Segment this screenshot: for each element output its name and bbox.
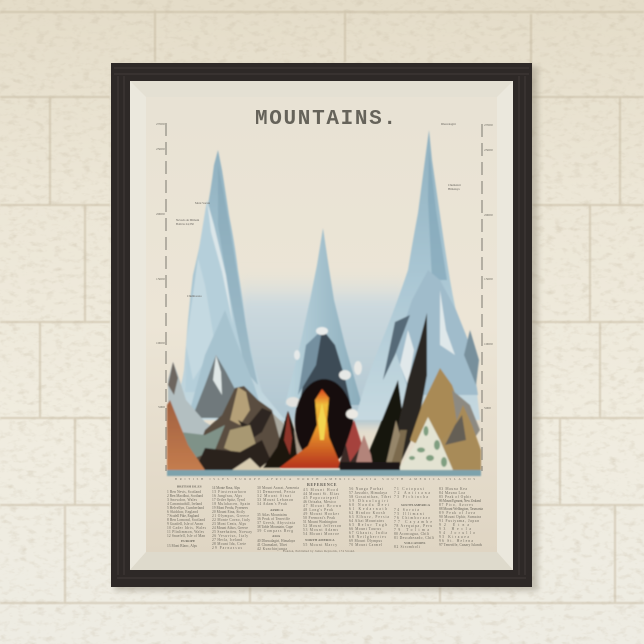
summit annotation: left peak: Bolivia 24,350 — [176, 222, 194, 227]
column 6: South America and Volcanoes: 78 Arequipa, Peru — [394, 524, 432, 529]
column 1: British Isles: 11 Plinlimmon, Wales — [167, 530, 205, 535]
right height scale: 10000 — [484, 342, 493, 346]
column 4: North America: 51 Mount Washington — [303, 520, 337, 524]
column 5: Asia continued: 66 Mount Taurus — [349, 527, 382, 531]
column 7: Islands: 85 Peak of Ophir — [439, 495, 472, 499]
column 4: North America: 47 Mount Brown — [303, 504, 341, 508]
column 2: Europe: 27 Hecla, Iceland — [212, 538, 242, 543]
column 3: Africa and Asia: 42 Kunchinjunga — [257, 547, 287, 551]
right height scale: 15000 — [484, 277, 493, 281]
left range: foothills — [180, 386, 290, 470]
column 7: Islands: 91 Fusiyama, Japan — [439, 519, 479, 524]
column 7: Islands: 89 Peak of Java — [439, 511, 475, 515]
right range: dark spires — [362, 313, 427, 468]
column 3: Africa and Asia: 31 Demavend, Persia — [257, 490, 295, 495]
summit annotation: right peak: Chumalari — [448, 183, 461, 187]
column 3: Africa and Asia: 39 Compass Berg — [257, 529, 293, 533]
column 7: Islands: 96 St. Helena — [439, 539, 473, 543]
column 5: Asia continued: 61 Kedarnath — [349, 507, 387, 511]
reference table — [167, 482, 483, 551]
green-and-white mountain — [398, 417, 453, 470]
column 1: British Isles — [167, 484, 207, 549]
summit annotation: right peak: Himalaya — [448, 187, 460, 191]
column 6: South America and Volcanoes: 77 Cayambe — [394, 520, 432, 524]
column 5: Asia continued: 63 Elburz, Persia — [349, 515, 389, 520]
column 2: Europe: 25 Sneehatten, Norway — [212, 530, 252, 535]
column 3: Africa and Asia: 35 Atlas Mountains — [257, 513, 288, 517]
column 3: Africa and Asia: 38 Table Mountain, Cape — [257, 525, 293, 530]
volcano cave with lava cone — [279, 379, 353, 468]
column 5: Asia continued: 65 Belur Tagh — [349, 523, 387, 527]
column 5: Asia continued — [349, 487, 391, 547]
column 5: Asia continued: 67 Ghauts, India — [349, 531, 387, 536]
column 4: North America: 54 Mount Monroe — [303, 532, 339, 536]
column 3: Africa and Asia: 32 Mount Sinai — [257, 494, 291, 498]
column 3: Africa and Asia: 34 Adam's Peak — [257, 502, 287, 506]
column 6: South America and Volcanoes: 80 Aconcagua, Chili — [394, 532, 429, 537]
picture frame — [111, 63, 532, 587]
column 1: British Isles: 2 Ben Macdhui, Scotland — [167, 494, 203, 499]
column 4: North America: 46 Orizaba, Mexico — [303, 500, 336, 505]
column 2: Europe: 21 Olympus, Greece — [212, 514, 249, 519]
publisher line: London, Published by James Reynolds, 174 Strand. — [283, 550, 355, 553]
column 3: Africa and Asia — [257, 486, 299, 551]
frame shadow — [114, 66, 538, 591]
column 1: British Isles: BRITISH ISLES — [177, 484, 202, 488]
column 1: British Isles: 5 Helvellyn, Cumberland — [167, 506, 204, 511]
right height scale: 20000 — [484, 213, 493, 217]
column 1: British Isles: 1 Ben Nevis, Scotland — [167, 490, 201, 495]
column 7: Islands: 83 Mauna Kea — [439, 487, 467, 491]
column 1: British Isles: 3 Snowdon, Wales — [167, 498, 198, 503]
column 1: British Isles: 8 Ben Lomond, Scotland — [167, 518, 205, 523]
column 2: Europe: 19 Mont Perdu, Pyrenees — [212, 506, 249, 511]
summit annotation: right peak: Dhawalagiri — [441, 122, 456, 126]
column 6: South America and Volcanoes: 71 Cotopaxi — [394, 487, 424, 491]
summit annotation: left peak — [176, 201, 211, 298]
column 5: Asia continued: 60 Nanda Devi — [349, 503, 389, 507]
column 4: North America: 53 Mount Adams — [303, 528, 339, 532]
mountain illustration — [167, 130, 481, 476]
column 2: Europe: 22 Monte Corno, Italy — [212, 518, 250, 523]
left range: ice peaks — [168, 150, 285, 470]
column 5: Asia continued: 58 Gosainthan, Tibet — [349, 495, 391, 500]
column 1: British Isles: 4 Carrantuohill, Ireland — [167, 502, 202, 507]
column 2: Europe: 29 Parnassus — [212, 546, 243, 550]
column 1: British Isles: 7 Scafell Pike, England — [167, 514, 199, 519]
column 1: British Isles: 6 Skiddaw, England — [167, 510, 198, 515]
left height scale: 5000 — [158, 405, 165, 409]
column 4: North America: 43 Mount Hood — [303, 488, 338, 492]
column 7: Islands: 93 Hecla — [439, 527, 471, 531]
column 7: Islands — [439, 487, 483, 548]
column 3: Africa and Asia: 30 Mount Ararat, Armenia — [257, 486, 299, 491]
column 5: Asia continued: 69 Mount Olympus — [349, 539, 383, 543]
column 2: Europe: 28 Mount Ida, Crete — [212, 542, 246, 547]
table heading: REFERENCE — [307, 482, 337, 487]
column 4: North America: 44 Mount St. Elias — [303, 492, 340, 496]
right range: ice peaks — [355, 130, 480, 420]
column 7: Islands: 84 Mauna Loa — [439, 491, 465, 495]
column 2: Europe: 16 Jungfrau, Alps — [212, 494, 243, 499]
column 2: Europe: 17 Ortler Spitz, Tyrol — [212, 498, 245, 503]
column 7: Islands: 97 Teneriffe, Canary Islands — [439, 543, 483, 548]
column 2: Europe: 24 Mount Athos, Greece — [212, 526, 248, 531]
column 5: Asia continued: 56 Nanga Parbat — [349, 487, 383, 491]
column 1: British Isles: 12 Snaefell, Isle of Man — [167, 534, 205, 539]
column 5: Asia continued: 59 Dhaulagiri — [349, 499, 388, 503]
column 6: South America and Volcanoes: 75 Illimani — [394, 512, 424, 516]
summit annotation: left peak: Nevado de Illimani — [176, 218, 199, 222]
column 4: North America: NORTH AMERICA — [305, 538, 335, 542]
column 6: South America and Volcanoes: SOUTH AMERICA — [401, 503, 431, 507]
column 1: British Isles: 9 Goatfell, Isle of Arran — [167, 522, 203, 527]
paper print — [146, 97, 497, 552]
column 5: Asia continued: 70 Mount Carmel — [349, 543, 382, 547]
column 3: Africa and Asia: 36 Peak of Teneriffe — [257, 517, 290, 521]
column 4: North America: 45 Popocatepetl — [303, 496, 338, 500]
column 1: British Isles: 13 Mont Blanc, Alps — [167, 544, 198, 549]
column 6: South America and Volcanoes: VOLCANOES — [404, 541, 426, 545]
right height scale: 27000 — [484, 123, 493, 127]
small red volcanoes — [338, 409, 373, 468]
orange mountain — [167, 400, 205, 470]
column 7: Islands: 92 Etna — [439, 523, 469, 527]
column 6: South America and Volcanoes: 76 Chimborazo — [394, 516, 430, 520]
clouds behind the peaks — [238, 270, 408, 425]
column 3: Africa and Asia: 40 Dhawalagiri, Himalaya — [257, 539, 295, 544]
title: MOUNTAINS. — [255, 108, 396, 131]
column 3: Africa and Asia: 33 Mount Lebanon — [257, 498, 293, 502]
water strip — [167, 470, 481, 476]
column 2: Europe: 23 Mont Cenis, Alps — [212, 522, 247, 527]
left height scale: 15000 — [156, 277, 165, 281]
left height scale: 27000 — [156, 122, 165, 126]
mat board — [130, 81, 513, 570]
column 6: South America and Volcanoes: 79 Tolima — [394, 528, 429, 532]
column 5: Asia continued: 57 Jawahir, Himalaya — [349, 491, 387, 496]
left height scale: 25000 — [156, 147, 165, 151]
column 1: British Isles: EUROPE — [181, 539, 196, 543]
right height scale: 25000 — [484, 148, 493, 152]
column 3: Africa and Asia: ASIA — [272, 534, 281, 538]
centre peak — [285, 228, 362, 410]
column 7: Islands: 94 Jorullo — [439, 531, 475, 535]
column 4: North America: 50 Fremont's Peak — [303, 516, 335, 520]
base shadow — [340, 462, 400, 470]
right height scale: 5000 — [484, 406, 491, 410]
left height scale: 20000 — [156, 212, 165, 216]
column 2: Europe: 18 Mulahacen, Spain — [212, 502, 250, 507]
summit annotation: left peak: Mont Sorata — [195, 201, 211, 205]
column 5: Asia continued: 62 Hindoo Koosh — [349, 511, 385, 515]
column 5: Asia continued: 68 Neilgherries — [349, 535, 387, 539]
column 7: Islands: 87 Pico, Azores — [439, 503, 474, 508]
column 6: South America and Volcanoes: 74 Sorata — [394, 508, 419, 512]
column 3: Africa and Asia: 41 Chumalari, Tibet — [257, 543, 287, 548]
column 3: Africa and Asia: AFRICA — [270, 508, 284, 512]
column 2: Europe: 20 Mount Etna, Sicily — [212, 510, 245, 515]
left height scale: 10000 — [156, 341, 165, 345]
column 4: North America: 52 Mount Jefferson — [303, 524, 341, 528]
right range: brown and tan mountains — [410, 368, 481, 470]
column 2: Europe: 26 Vesuvius, Italy — [212, 534, 248, 539]
left height scale — [156, 122, 166, 471]
left volcano — [263, 411, 308, 468]
column 7: Islands: 90 Mount Ophir, Sumatra — [439, 515, 481, 520]
column 7: Islands: 95 Kirauea — [439, 535, 469, 539]
column 3: Africa and Asia: 37 Geesh, Abyssinia — [257, 521, 295, 526]
column 7: Islands: 88 Mount Wellington, Tasmania — [439, 507, 483, 512]
summit annotation: left peak: Chimborazo — [187, 294, 202, 298]
column 2: Europe: 15 Finsteraarhorn — [212, 490, 246, 494]
column 7: Islands: 86 Mount Egmont, New Zealand — [439, 499, 481, 504]
base labels: BRITISH ISLES EUROPE AFRICA NORTH AMERICA ASIA SOUTH AMERICA ISLANDS — [175, 477, 475, 481]
column 6: South America and Volcanoes: 72 Antisana — [394, 491, 430, 495]
column 6: South America and Volcanoes: 81 Descabezado, Chili — [394, 536, 434, 541]
column 4: North America: 49 Mount Hooker — [303, 512, 340, 516]
column 6: South America and Volcanoes: 82 Stromboli — [394, 545, 420, 549]
column 6: South America and Volcanoes — [394, 487, 434, 549]
column 4: North America: 48 Long's Peak — [303, 508, 333, 512]
column 1: British Isles: 10 Cader Idris, Wales — [167, 526, 207, 531]
column 4: North America: 55 Mount Marcy — [303, 543, 337, 547]
column 4: North America — [303, 488, 341, 547]
right height scale — [482, 123, 493, 471]
column 2: Europe — [212, 486, 252, 550]
column 2: Europe: 14 Monte Rosa, Alps — [212, 486, 241, 491]
column 6: South America and Volcanoes: 73 Pichincha — [394, 495, 428, 499]
column 5: Asia continued: 64 Altai Mountains — [349, 519, 385, 523]
summit annotation: right peak — [441, 122, 461, 191]
